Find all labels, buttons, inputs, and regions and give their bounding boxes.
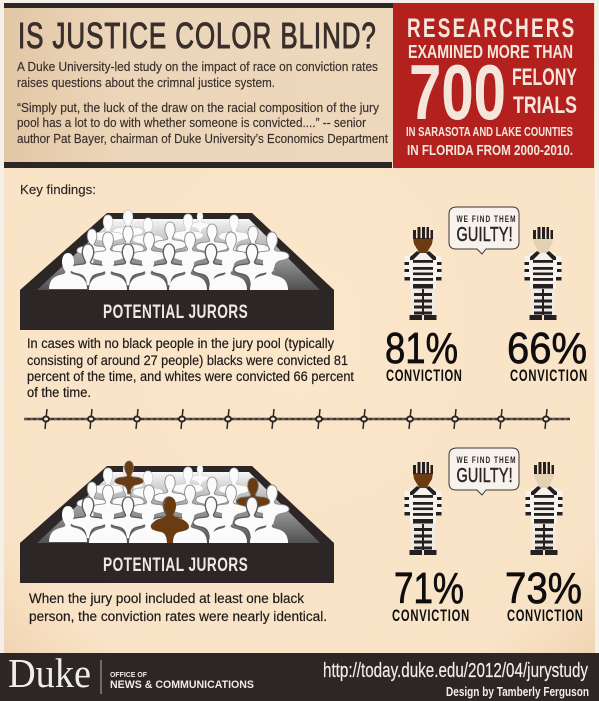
stat 71%: CONVICTION (392, 607, 469, 626)
finding 1 text: percent of the time, and whites were convicted 66 percent (27, 369, 354, 384)
jury box 2 (20, 461, 334, 583)
stat 81%: 81% (385, 324, 458, 373)
office label: OFFICE OF (110, 670, 147, 679)
jury box 2 label: POTENTIAL JURORS (103, 554, 248, 576)
footer (0, 650, 599, 701)
red panel: researchers stat: 700 (409, 48, 506, 136)
quote text: “Simply put, the luck of the draw on the racial composition of the jury (17, 101, 380, 115)
bubble 2 (449, 448, 519, 495)
barbed wire divider (24, 409, 570, 429)
office label (110, 670, 254, 691)
finding 1 text: of the time. (27, 385, 91, 400)
red panel: researchers stat (393, 3, 594, 168)
key findings heading: Key findings: (20, 182, 96, 197)
stat 73%: 73% (505, 564, 582, 613)
duke logo: Duke (8, 650, 91, 696)
stat 81%: CONVICTION (386, 367, 462, 386)
prisoner: white defendant 1 (524, 227, 562, 320)
prisoner: black defendant 1 (404, 227, 442, 320)
office label: NEWS & COMMUNICATIONS (110, 679, 254, 691)
stat 73%: CONVICTION (507, 607, 583, 626)
finding 1 text (27, 336, 354, 400)
red panel: researchers stat: RESEARCHERS (407, 13, 574, 43)
quote text: author Pat Bayer, chairman of Duke University’s Economics Department (17, 132, 388, 146)
bubble 1 (449, 207, 519, 254)
prisoner: white defendant 2 (526, 462, 562, 555)
stat 71%: 71% (394, 564, 464, 613)
intro text: A Duke University-led study on the impact of race on conviction rates (17, 60, 378, 74)
stat 71% (392, 564, 469, 626)
finding 2 text: When the jury pool included at least one black (29, 591, 304, 606)
title: IS JUSTICE COLOR BLIND? (18, 16, 376, 56)
header panel (4, 3, 393, 168)
finding 1 text: In cases with no black people in the jury pool (typically (27, 336, 334, 351)
red panel: researchers stat: TRIALS (513, 92, 577, 119)
prisoner: black defendant 2 (404, 462, 442, 555)
finding 2 text (29, 591, 327, 624)
finding 1 text: consisting of around 27 people) blacks were convicted 81 (27, 353, 348, 368)
quote text: pool has a lot to do with whether someone is convicted....” -- senior (17, 116, 366, 130)
intro text: raises questions about the crimnal justice system. (17, 76, 275, 90)
jury box 1 label: POTENTIAL JURORS (103, 301, 248, 323)
stat 66%: CONVICTION (510, 367, 587, 386)
stat 66%: 66% (507, 324, 587, 373)
jury box 1 (20, 210, 334, 330)
finding 2 text: person, the conviction rates were nearly identical. (29, 609, 327, 624)
intro text (17, 60, 378, 90)
quote text (17, 101, 388, 146)
